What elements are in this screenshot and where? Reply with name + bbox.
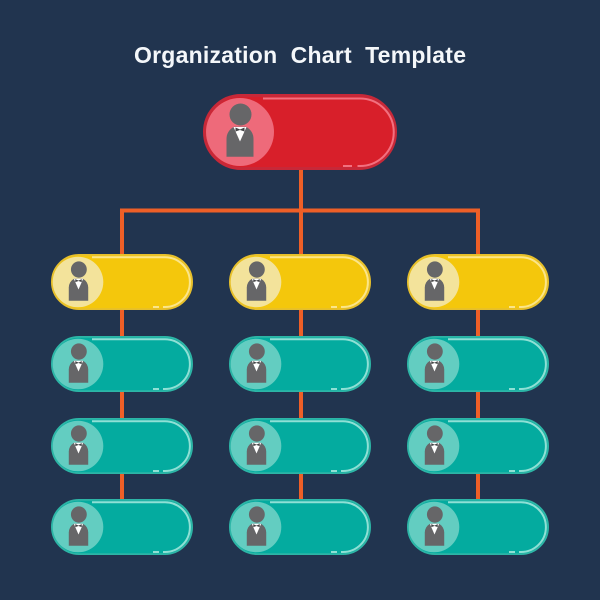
teal node: column 3 row 1 — [408, 337, 548, 391]
title: Organization Chart Template — [134, 42, 466, 68]
teal node: column 2 row 2 — [230, 419, 370, 473]
yellow node: column 2 — [230, 255, 370, 309]
teal node: column 2 row 3 — [230, 500, 370, 554]
top node: red pill — [204, 96, 396, 168]
teal node: column 1 row 1 — [52, 337, 192, 391]
teal node: column 1 row 2 — [52, 419, 192, 473]
teal node: column 3 row 2 — [408, 419, 548, 473]
teal node: column 1 row 3 — [52, 500, 192, 554]
yellow node: column 3 — [408, 255, 548, 309]
teal node: column 2 row 1 — [230, 337, 370, 391]
teal node: column 3 row 3 — [408, 500, 548, 554]
connector lines — [122, 168, 478, 503]
yellow node: column 1 — [52, 255, 192, 309]
